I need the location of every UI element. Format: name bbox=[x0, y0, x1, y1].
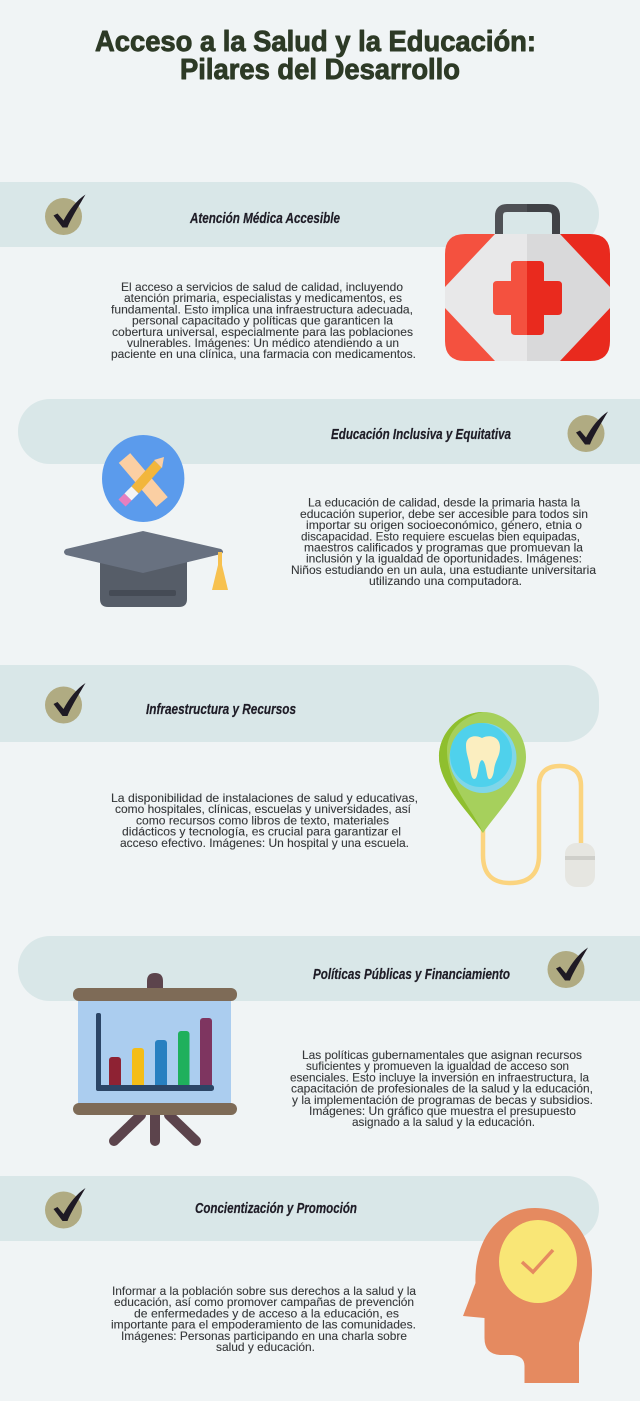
text block: concientización: Informar a la población sobre sus derechos a la salud y la bbox=[112, 1284, 416, 1298]
panel: atención médica bbox=[0, 182, 610, 361]
text block: atención médica: atención primaria, especialistas y medicamentos, es bbox=[124, 291, 402, 305]
text block: políticas: capacitación de profesionales de la salud y la educación, bbox=[291, 1082, 593, 1096]
title bbox=[95, 26, 536, 86]
text block: políticas: suficientes y promueven la igualdad de acceso son bbox=[306, 1059, 569, 1073]
icon: check badge bbox=[45, 1188, 86, 1228]
text block: educación bbox=[291, 496, 596, 588]
text block: políticas bbox=[290, 1048, 593, 1129]
text block: concientización: Imágenes: Personas participando en una charla sobre bbox=[121, 1329, 407, 1343]
text block: educación: importar su origen socioeconómico, género, etnia o bbox=[306, 518, 582, 532]
text block: atención médica: paciente en una clínica, una farmacia con medicamentos. bbox=[111, 347, 416, 361]
text block: políticas: Las políticas gubernamentales que asignan recursos bbox=[302, 1048, 582, 1062]
text block: educación: La educación de calidad, desde la primaria hasta la bbox=[308, 496, 580, 510]
icon: check badge bbox=[568, 412, 608, 452]
text block: políticas: Imágenes: Un gráfico que muestra el presupuesto bbox=[309, 1104, 576, 1118]
text block: infraestructura bbox=[111, 791, 418, 850]
icon: medical kit bbox=[445, 208, 610, 361]
icon: location pin with cable and mouse bbox=[439, 712, 595, 887]
text block: concientización: salud y educación. bbox=[216, 1340, 315, 1354]
text block: políticas: y la implementación de programas de becas y subsidios. bbox=[292, 1093, 593, 1107]
panel: infraestructura bbox=[0, 665, 599, 887]
icon: head with check bbox=[463, 1208, 592, 1383]
text block: infraestructura: como recursos como libros de texto, materiales bbox=[136, 813, 389, 827]
icon: check badge bbox=[45, 194, 86, 235]
text block: educación: educación superior, debe ser accesible para todos sin bbox=[300, 507, 588, 521]
text block: políticas: esenciales. Esto incluye la inversión en infraestructura, la bbox=[290, 1070, 589, 1084]
band: infraestructura bbox=[0, 665, 599, 742]
chart: presentation board with bars bbox=[73, 973, 237, 1141]
text block: atención médica: cobertura universal, especialmente para las poblaciones bbox=[112, 325, 413, 339]
text block: educación: inclusión y la igualdad de oportunidades. Imágenes: bbox=[306, 552, 582, 566]
heading: concientización: Concientización y Promoción bbox=[195, 1201, 357, 1217]
text block: concientización: importante para el empoderamiento de las comunidades. bbox=[111, 1318, 416, 1332]
text block: concientización: de enfermedades y de acceso a la educación, es bbox=[134, 1306, 399, 1320]
icon: check badge bbox=[548, 948, 588, 988]
text block: concientización: educación, así como promover campañas de prevención bbox=[114, 1295, 414, 1309]
heading: infraestructura: Infraestructura y Recursos bbox=[146, 702, 296, 718]
panel: concientización bbox=[0, 1176, 599, 1383]
text block: infraestructura: como hospitales, clínicas, escuelas y universidades, así bbox=[115, 802, 412, 816]
icon: ruler and pencil bbox=[102, 435, 184, 522]
icon: check badge bbox=[45, 683, 86, 724]
text block: infraestructura: acceso efectivo. Imágenes: Un hospital y una escuela. bbox=[120, 836, 409, 850]
text block: educación: utilizando una computadora. bbox=[369, 574, 522, 588]
text block: educación: discapacidad. Esto requiere escuelas bien equipadas, bbox=[301, 529, 580, 543]
text block: políticas: asignado a la salud y la educación. bbox=[352, 1115, 535, 1129]
text block: educación: Niños estudiando en un aula, una estudiante universitaria bbox=[291, 563, 596, 577]
icon: graduation cap bbox=[64, 531, 228, 607]
text block: atención médica: personal capacitado y políticas que garanticen la bbox=[132, 314, 393, 328]
panel: educación inclusiva bbox=[18, 399, 640, 607]
heading: políticas: Políticas Públicas y Financiamiento bbox=[313, 967, 510, 983]
heading: educación: Educación Inclusiva y Equitativa bbox=[331, 427, 511, 443]
title: Acceso a la Salud y la Educación: bbox=[95, 26, 536, 58]
band: concientización bbox=[0, 1176, 599, 1241]
text block: educación: maestros calificados y programas que promuevan la bbox=[304, 540, 583, 554]
text block: atención médica: fundamental. Esto implica una infraestructura adecuada, bbox=[111, 302, 413, 316]
band: políticas bbox=[18, 936, 640, 1001]
title: Pilares del Desarrollo bbox=[180, 54, 460, 86]
text block: infraestructura: La disponibilidad de instalaciones de salud y educativas, bbox=[111, 791, 418, 805]
band: atención médica bbox=[0, 182, 599, 247]
text block: atención médica bbox=[111, 280, 416, 361]
panel: políticas públicas bbox=[18, 936, 640, 1141]
heading: atención médica: Atención Médica Accesible bbox=[189, 211, 340, 227]
text block: infraestructura: didácticos y tecnología, es crucial para garantizar el bbox=[122, 825, 401, 839]
text block: concientización bbox=[111, 1284, 416, 1354]
text block: atención médica: vulnerables. Imágenes: Un médico atendiendo a un bbox=[127, 336, 399, 350]
text block: atención médica: El acceso a servicios de salud de calidad, incluyendo bbox=[121, 280, 403, 294]
band: educación bbox=[18, 399, 640, 464]
